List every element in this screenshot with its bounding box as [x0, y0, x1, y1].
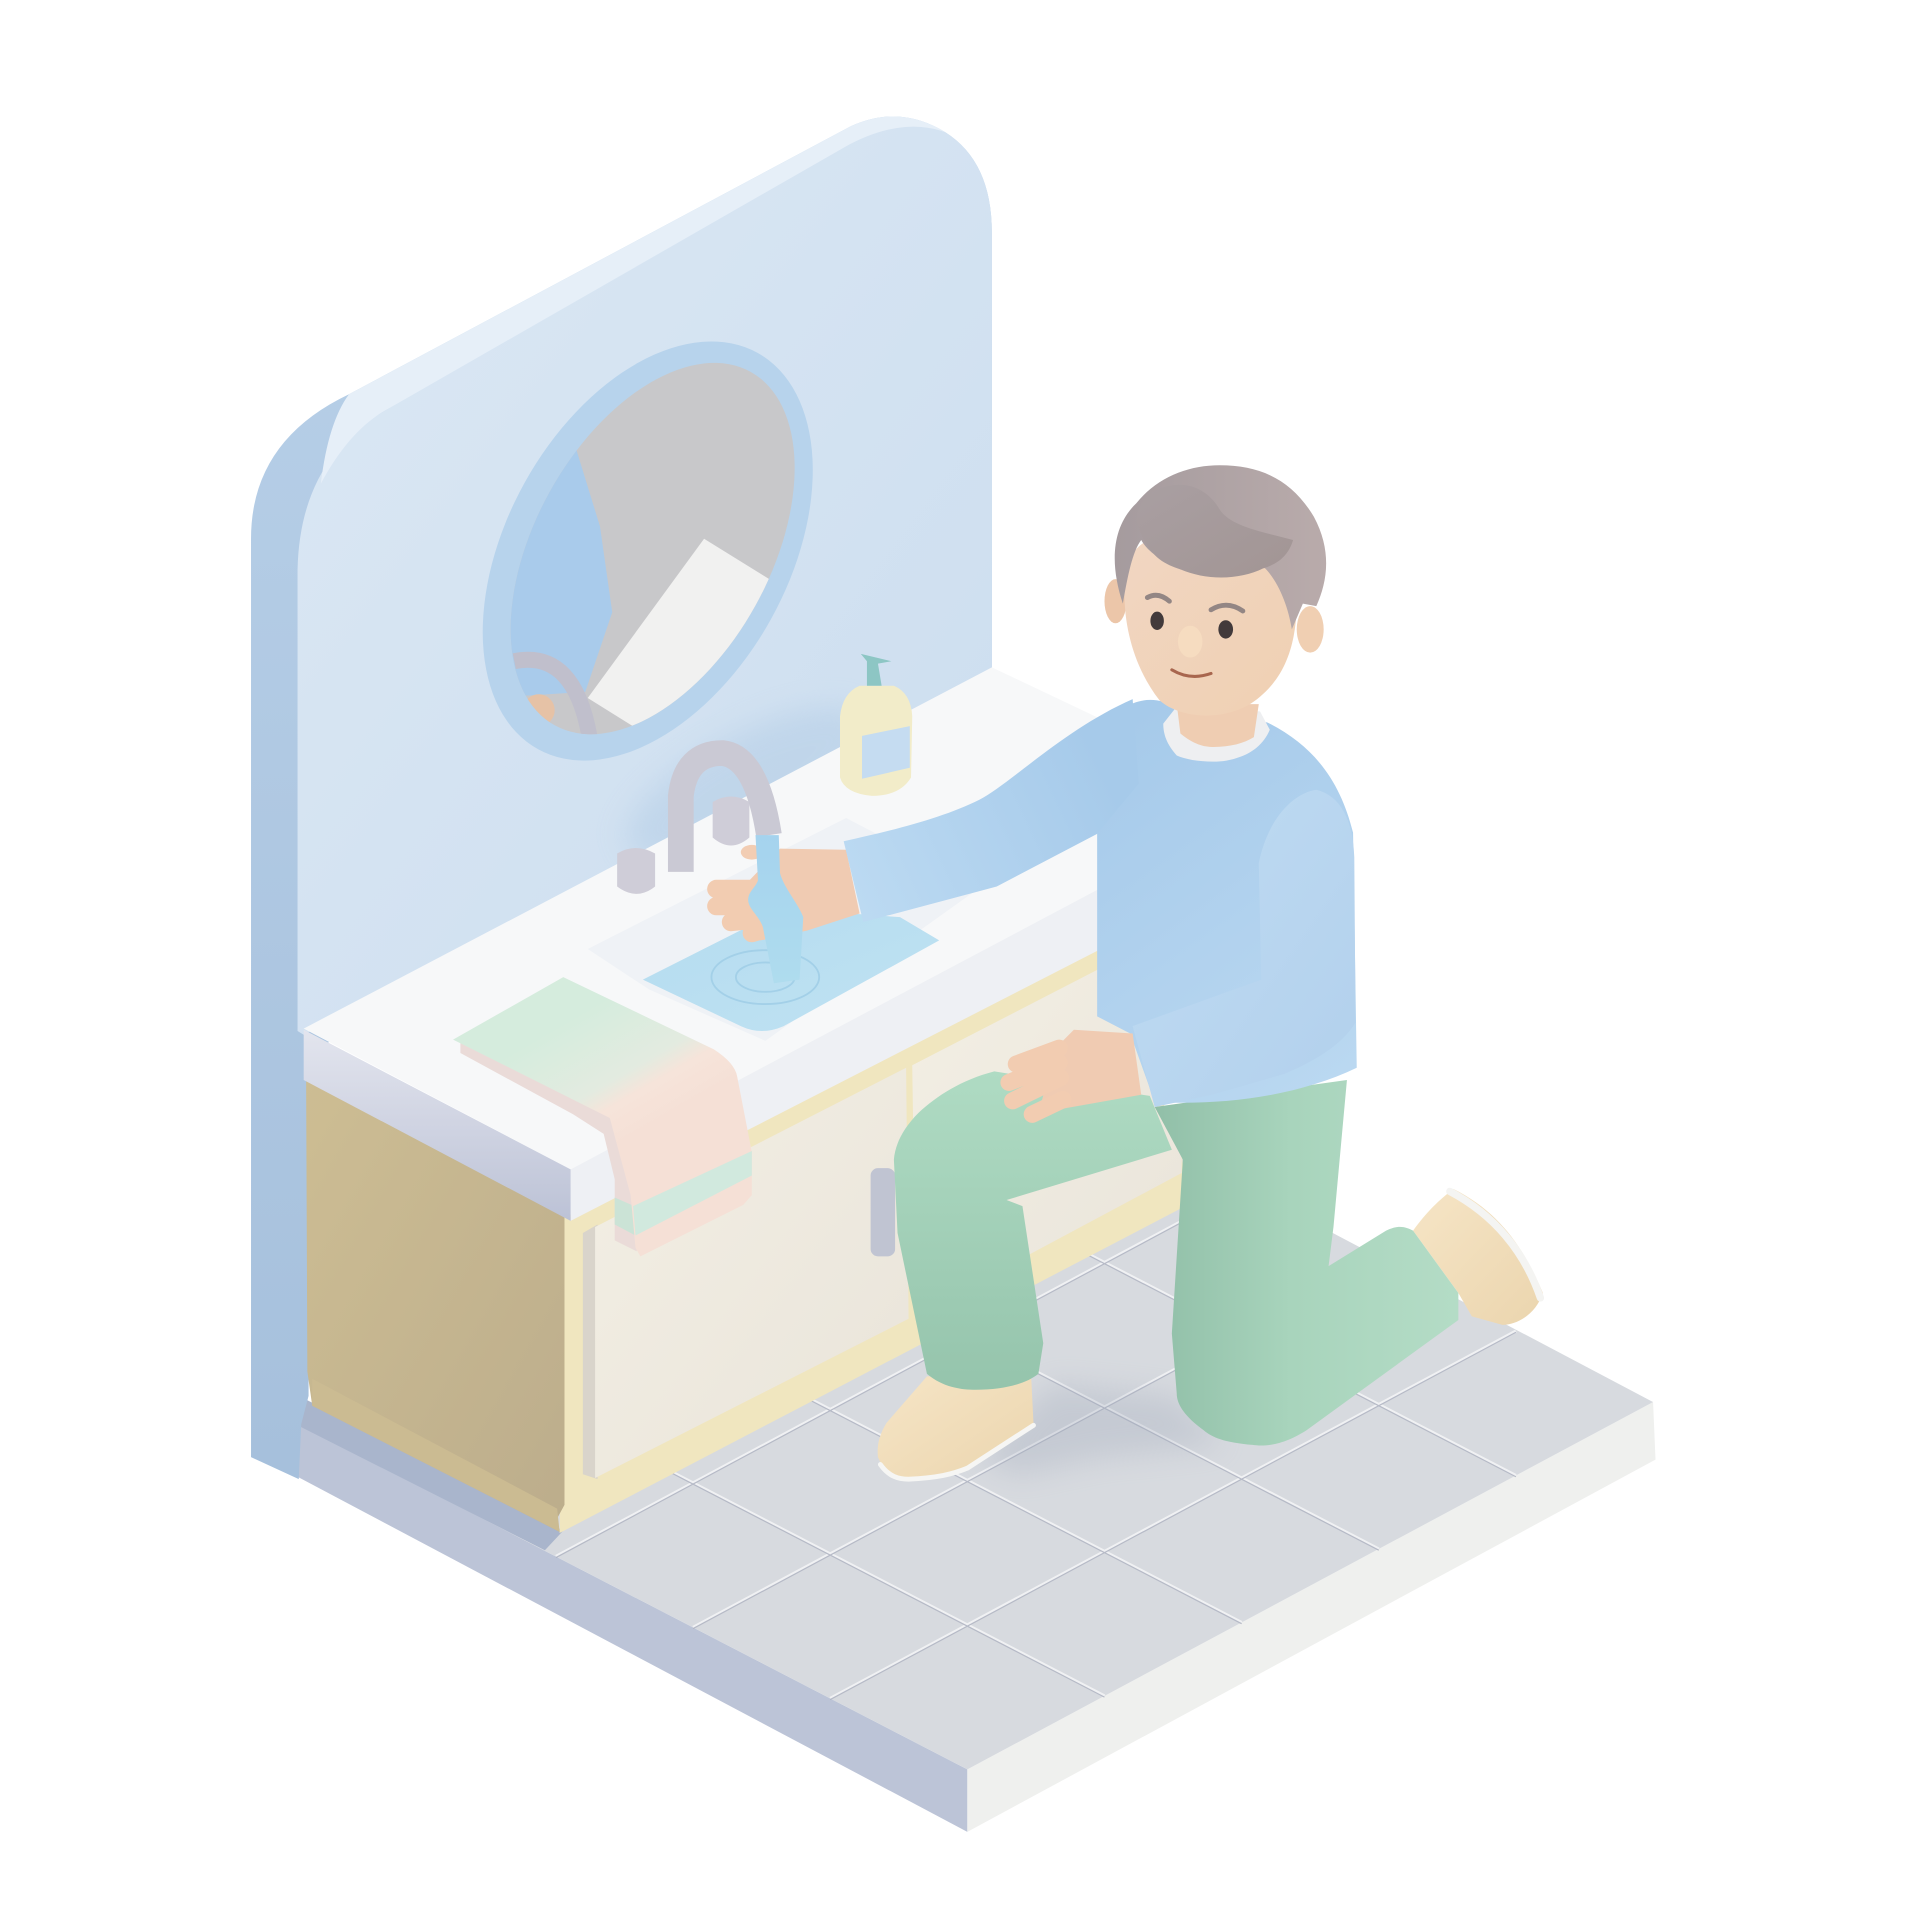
cabinet side panel: [306, 1078, 564, 1532]
mirror frame: [415, 285, 881, 817]
floor left side: [298, 1424, 967, 1832]
nose: [1178, 626, 1202, 658]
back leg: [1155, 1080, 1543, 1446]
back leg thigh and shin: [1155, 1080, 1458, 1446]
thumb: [741, 845, 763, 860]
fingers: [716, 889, 769, 933]
wall: [251, 116, 992, 1479]
floor platform: [298, 1053, 1656, 1832]
folded towel: [453, 977, 752, 1256]
shadow on wall behind faucet: [605, 677, 889, 890]
cabinet lower trim: [312, 1379, 560, 1532]
bottle: [840, 686, 912, 796]
shadow of man on floor: [980, 1384, 1224, 1476]
head: [1104, 465, 1326, 716]
palm: [1038, 1030, 1141, 1113]
towel top and drape: [453, 977, 752, 1256]
faucet and handles: [617, 753, 769, 894]
pump: [861, 654, 891, 686]
towel underside fold: [460, 1041, 637, 1251]
countertop: [304, 667, 1108, 1221]
front boot: [878, 1374, 1033, 1480]
sink basin: [588, 818, 980, 1041]
towel green band: [633, 1151, 752, 1236]
cabinet front frame: [560, 943, 1185, 1533]
water stream: [748, 835, 803, 983]
mirror glass: [510, 362, 795, 734]
front thigh and shin: [894, 1071, 1172, 1390]
illustration: man washing his hand at a bathroom sink: [251, 116, 1656, 1832]
towel under fold green band: [615, 1198, 636, 1236]
right handle: [713, 797, 749, 846]
face: [1124, 539, 1297, 716]
back hair: [1115, 465, 1326, 629]
counter left edge: [304, 1030, 571, 1221]
wall side edge: [251, 116, 992, 1479]
left ear: [1104, 579, 1127, 623]
wall front face: [298, 120, 992, 1035]
door handle: [871, 1168, 895, 1256]
palm: [749, 849, 860, 940]
neck: [1177, 704, 1259, 747]
collar: [1163, 707, 1270, 762]
soap dispenser: [840, 654, 912, 796]
basin recess: [588, 818, 980, 1041]
man kneeling: [716, 465, 1543, 1480]
outstretched arm sleeve: [844, 699, 1139, 922]
torso: [1097, 700, 1357, 1103]
ripples: [711, 950, 819, 1004]
right door: [912, 967, 1182, 1315]
mouth: [1172, 670, 1211, 676]
washing hand: [716, 845, 860, 940]
back boot: [1413, 1189, 1543, 1325]
back boot sole: [1450, 1191, 1540, 1298]
wall top rim highlight: [321, 116, 945, 484]
counter front edge: [571, 884, 1108, 1221]
blue-grey tile strip along cabinet: [300, 1400, 563, 1550]
eyes: [1150, 612, 1164, 630]
resting hand: [1009, 1030, 1141, 1114]
left handle: [617, 848, 655, 894]
front boot sole: [880, 1425, 1033, 1479]
fringe: [1136, 485, 1293, 578]
fingers: [1009, 1048, 1063, 1114]
water in sink: [643, 909, 939, 1031]
front leg: [878, 1071, 1172, 1480]
floor right side: [967, 1402, 1656, 1832]
eyebrows: [1147, 595, 1243, 611]
left door edge: [583, 1224, 598, 1479]
label: [862, 726, 910, 779]
floor tiles: [300, 1053, 1653, 1769]
near arm sleeve: [1133, 790, 1356, 1107]
right ear: [1297, 606, 1324, 653]
counter top surface: [304, 667, 1108, 1169]
neck and collar: [1163, 704, 1270, 762]
left door: [595, 1068, 909, 1478]
vanity cabinet: [306, 943, 1185, 1533]
round mirror: [482, 342, 813, 760]
spout: [681, 753, 769, 872]
